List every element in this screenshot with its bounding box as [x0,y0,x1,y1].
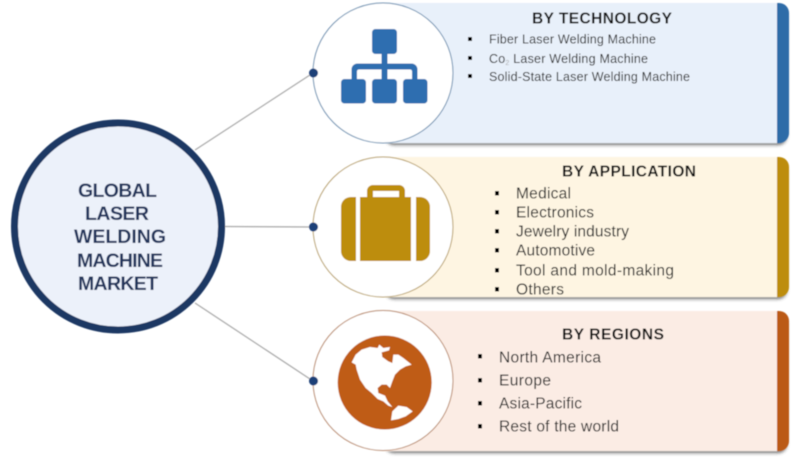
list: regions: Asia-Pacific [499,396,582,412]
heading: by application: BY APPLICATION [562,164,696,180]
list: technologies: 2 [505,60,509,67]
list: applications: Others [516,282,564,298]
list: technologies: Laser Welding Machine [510,52,648,66]
panel: by application [383,157,789,299]
list: applications: Electronics [516,204,594,222]
central title: LASER [85,203,149,225]
connector lines [195,73,313,381]
list: applications: Medical [516,186,571,202]
central title: GLOBAL [78,180,157,202]
panel: by regions [383,311,789,453]
regions circle [313,310,453,450]
central title: MACHINE [77,250,163,272]
list: technologies: Solid-State Laser Welding Machine [489,70,690,84]
panel: by technology [383,3,789,145]
icon: globe [338,336,432,430]
list: regions [478,350,619,436]
list: applications: Jewelry industry [516,224,629,240]
heading: by regions: BY REGIONS [562,326,664,344]
list: technologies [468,32,690,84]
list: regions: Europe [499,372,551,390]
icon: briefcase [341,185,430,261]
heading: by technology: BY TECHNOLOGY [532,10,673,28]
central circle [14,123,222,330]
list: technologies: Fiber Laser Welding Machine [489,32,656,46]
list: technologies: Co [489,52,505,66]
list: applications [495,186,674,298]
list: regions: North America [499,350,601,366]
list: applications: Tool and mold-making [516,262,674,280]
list: regions: Rest of the world [499,418,619,436]
application circle [313,157,453,297]
technology circle [313,3,453,143]
central title [74,180,166,295]
central title: MARKET [78,273,158,295]
central title: WELDING [74,226,166,248]
icon: hierarchy [341,29,428,104]
connector dots [309,68,318,386]
list: applications: Automotive [516,242,595,260]
